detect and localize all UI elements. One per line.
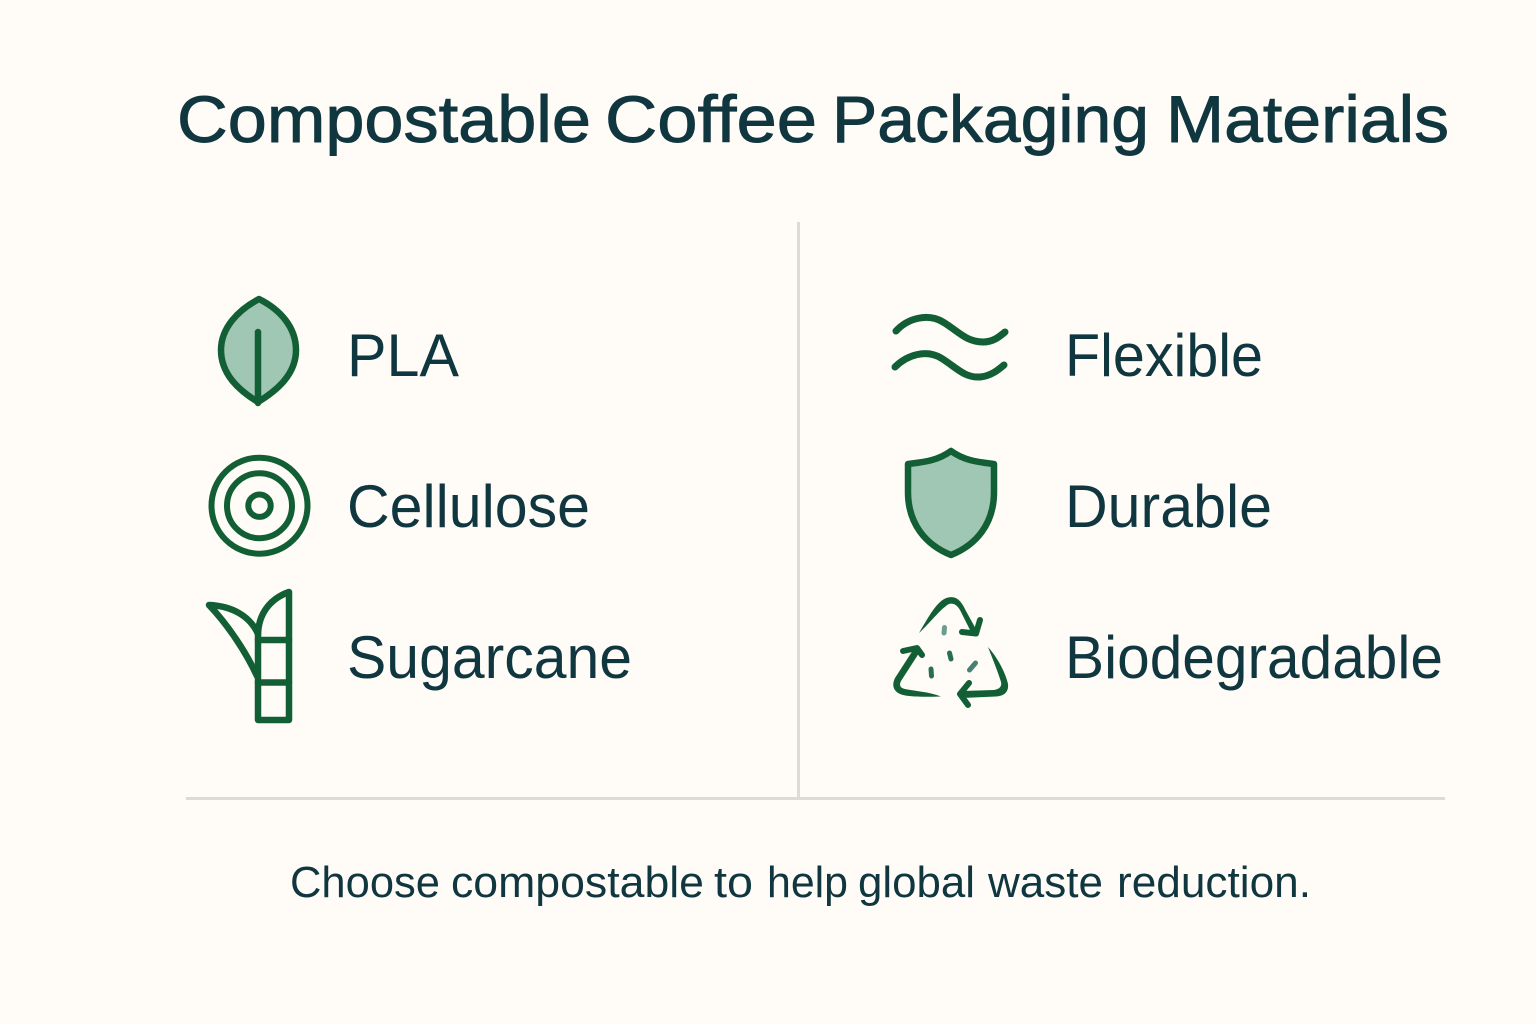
icon: sugarcane: [209, 592, 289, 720]
title: Compostable: [177, 82, 591, 156]
title: Coffee: [605, 82, 817, 156]
label: Cellulose: Cellulose: [347, 473, 590, 540]
title: Packaging: [832, 82, 1149, 156]
footer message: compostable: [451, 858, 704, 907]
label: Flexible: Flexible: [1065, 322, 1263, 389]
icon: concentric circles: [212, 458, 308, 554]
footer message: waste: [987, 858, 1103, 907]
title: [177, 82, 1449, 156]
label: Durable: Durable: [1065, 473, 1272, 540]
panel: properties: [893, 317, 1443, 705]
icon: waves: [895, 317, 1005, 377]
icon: shield: [908, 451, 994, 555]
footer message: reduction.: [1117, 858, 1311, 907]
icon: recycling with particles: [893, 597, 1008, 705]
footer message: help: [767, 858, 848, 907]
title: Materials: [1166, 82, 1449, 156]
icon: leaf: [221, 299, 296, 403]
footer message: Choose: [290, 858, 440, 907]
panel: materials: [209, 299, 632, 720]
footer message: [290, 858, 1311, 907]
label: PLA: PLA: [347, 322, 459, 389]
label: Biodegradable: Biodegradable: [1065, 624, 1443, 691]
footer message: global: [858, 858, 975, 907]
label: Sugarcane: Sugarcane: [347, 624, 632, 691]
footer message: to: [714, 858, 753, 907]
